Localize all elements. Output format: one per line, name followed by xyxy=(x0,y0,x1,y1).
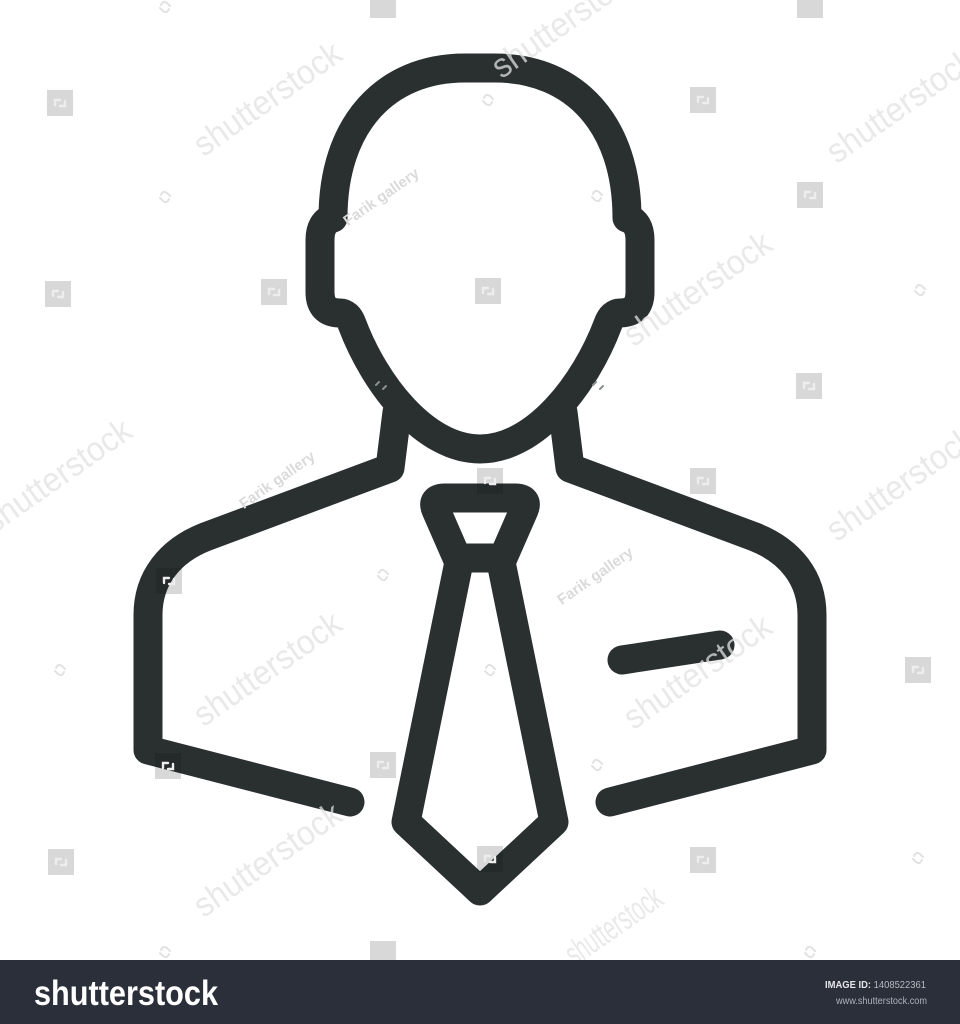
watermark: Farik gallery repeated text xyxy=(236,165,637,609)
icon: right neck and shoulder xyxy=(563,412,812,802)
watermark: Farik gallery repeated text: Farik gallery xyxy=(236,448,319,513)
icon: head and ears outline xyxy=(320,68,640,449)
icon: left neck and shoulder xyxy=(148,412,397,802)
watermark: Farik gallery repeated text: Farik gallery xyxy=(340,165,423,230)
watermark: shutterstock repeated text: shutterstock xyxy=(616,607,780,737)
website line: www.shutterstock.com xyxy=(835,996,927,1007)
watermark: Farik gallery repeated text: Farik gallery xyxy=(554,544,637,609)
watermark: shutterstock repeated text: shutterstock xyxy=(186,795,350,925)
watermark: shutterstock repeated text: shutterstock xyxy=(558,879,670,973)
icon: shirt pocket xyxy=(622,645,720,660)
watermark: shutterstock repeated text: shutterstock xyxy=(186,604,350,734)
watermark: shutterstock repeated text: shutterstock xyxy=(186,34,350,164)
image id line: IMAGE ID: 1408522361 xyxy=(825,980,926,991)
logo: shutterstock wordmark: shutterstock xyxy=(34,974,218,1013)
watermark: shutterstock repeated text: shutterstock xyxy=(616,224,780,354)
icon: businessman with tie xyxy=(148,68,812,891)
footer bar xyxy=(0,960,960,1024)
icon: tie blade xyxy=(406,562,554,891)
icon: tie knot xyxy=(435,498,525,558)
watermark: small link glyphs inside squares xyxy=(53,97,923,865)
